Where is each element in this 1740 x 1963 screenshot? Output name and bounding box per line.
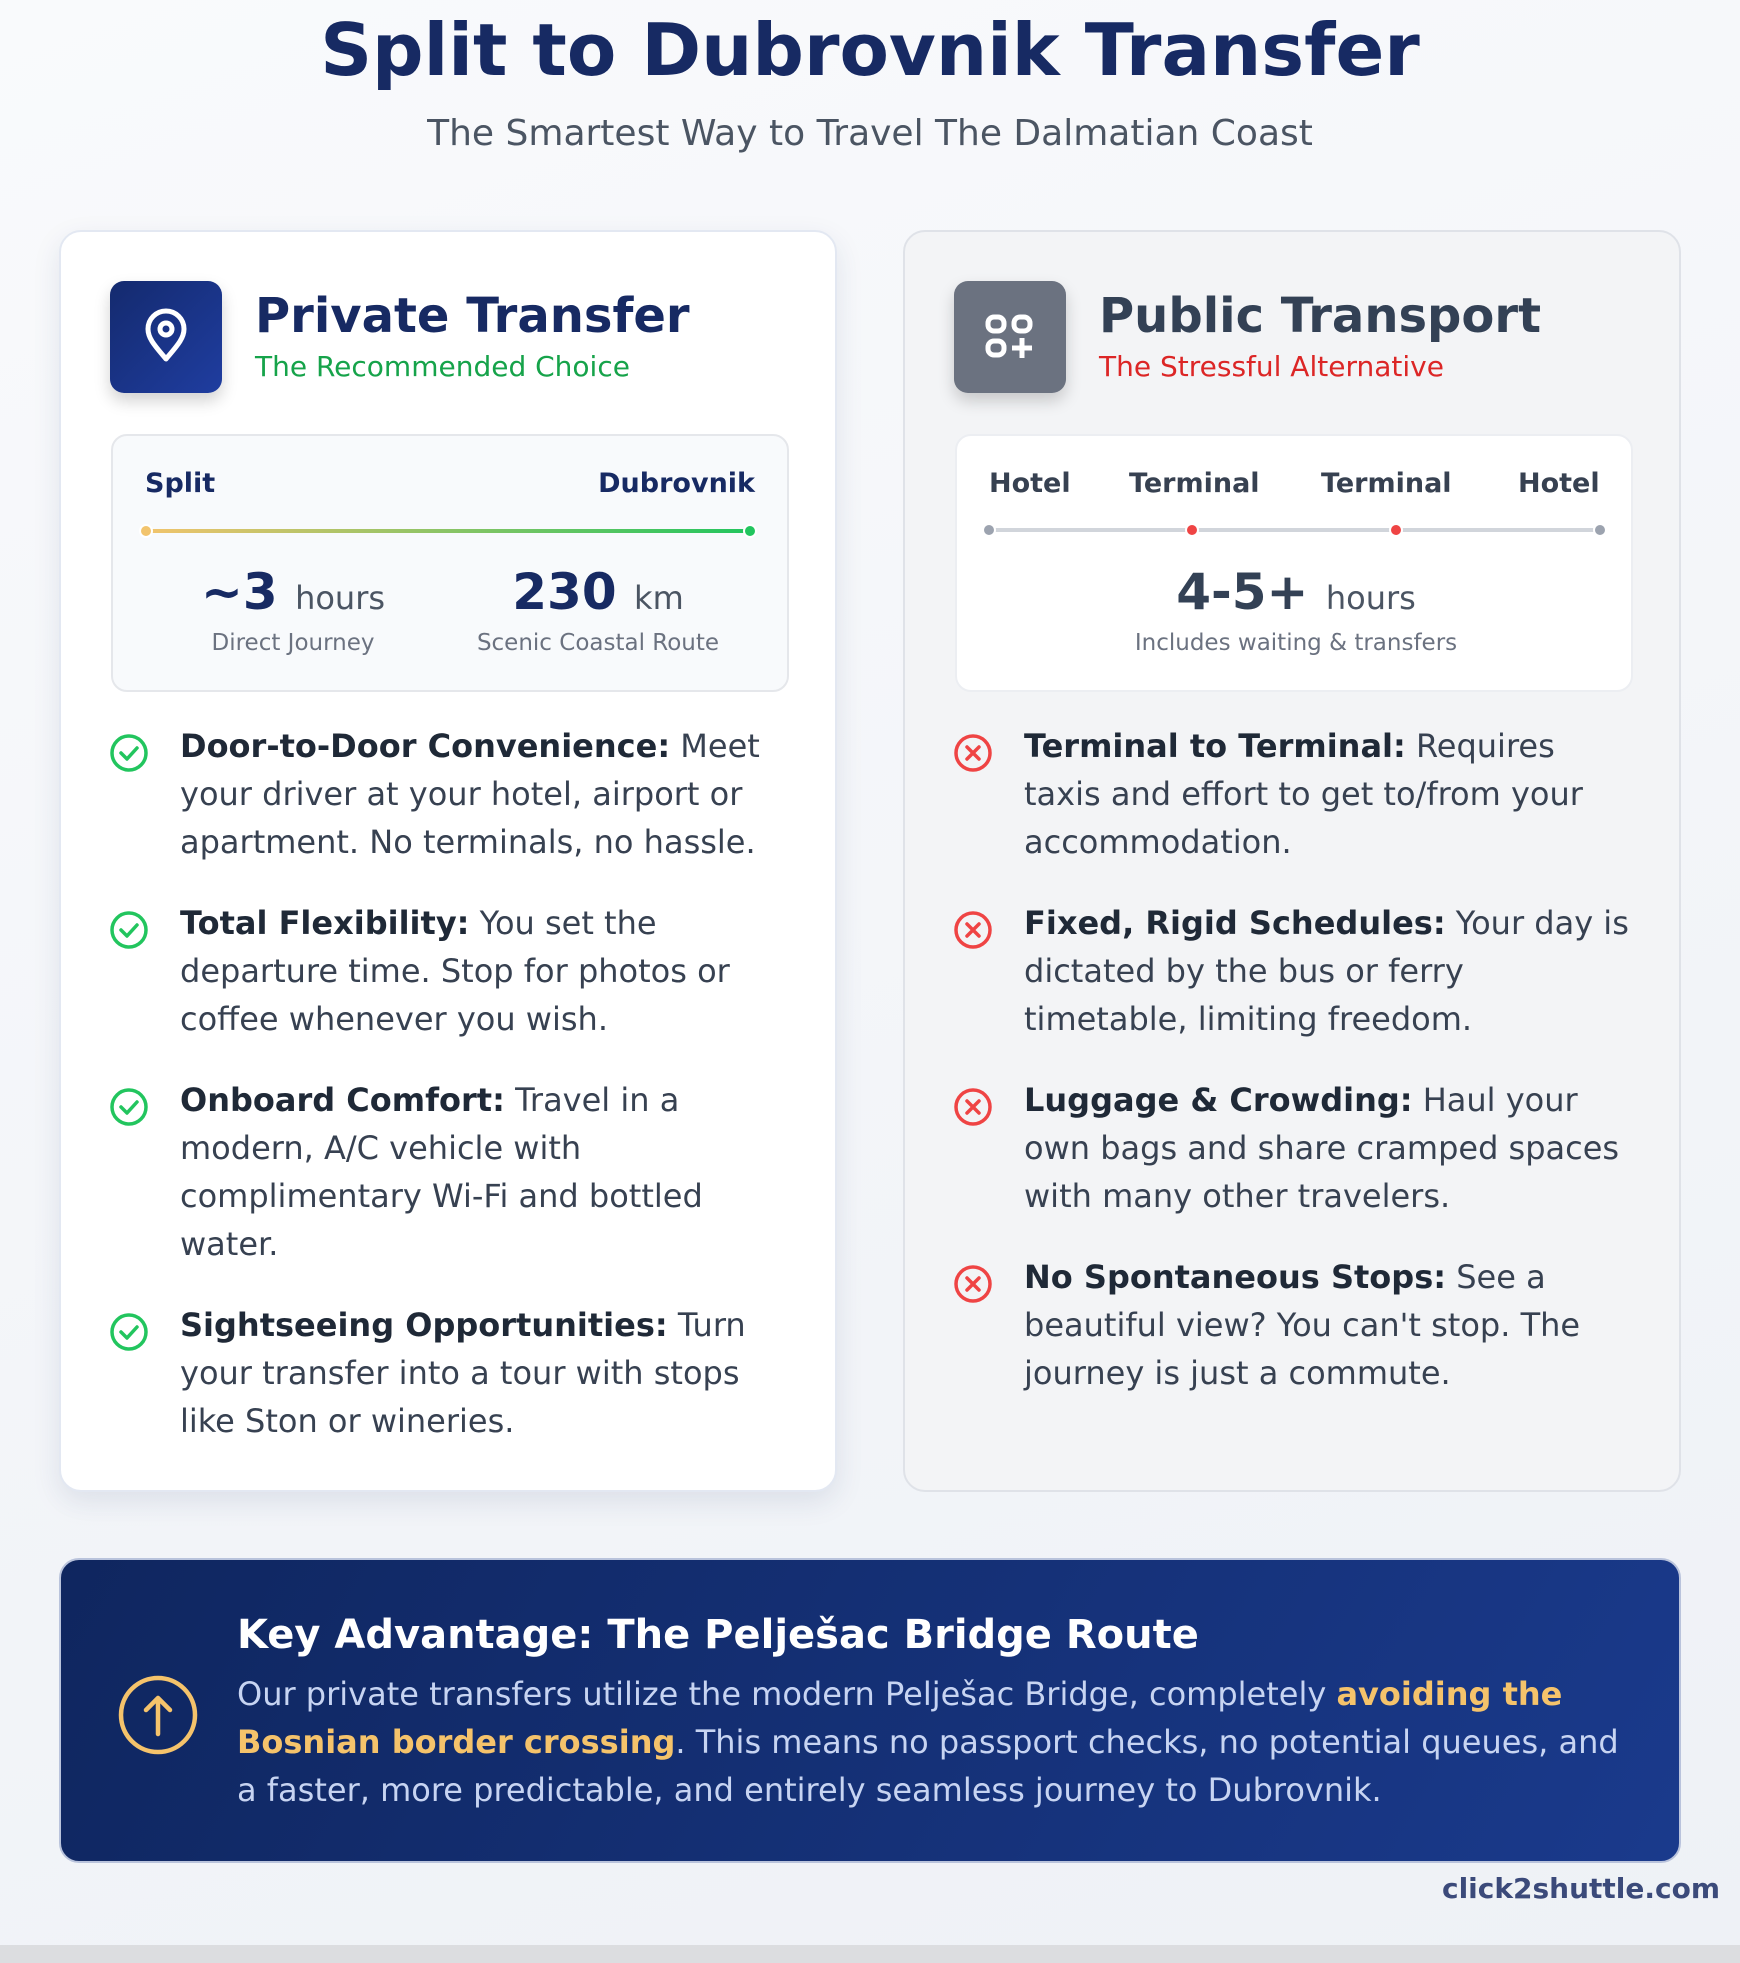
stat: km: 230 km (512, 563, 684, 621)
item: no stops: No Spontaneous Stops: See a beautiful view? You can't stop. The journey is just a commute. (1024, 1258, 1580, 1392)
label: Dubrovnik: Dubrovnik (598, 468, 755, 499)
stat: hours: ~3 hours (201, 563, 385, 621)
item: terminal: Terminal to Terminal: Requires taxis and effort to get to/from your accommodation. (1024, 727, 1583, 861)
route line with stops (984, 525, 1605, 535)
item: comfort: Onboard Comfort: Travel in a modern, A/C vehicle with complimentary Wi-Fi and bottled water. (180, 1081, 703, 1263)
banner: key advantage (59, 1558, 1681, 1863)
stat: hours: 4-5+ hours (1176, 563, 1416, 621)
item: luggage: Luggage & Crowding: Haul your own bags and share cramped spaces with many other travelers. (1024, 1081, 1619, 1215)
stat: km (477, 563, 719, 656)
footer: brand: click2shuttle.com (1442, 1872, 1720, 1905)
tagline: The Recommended Choice (255, 350, 630, 383)
item: door-to-door: Door-to-Door Convenience: Meet your driver at your hotel, airport or apartment. No terminals, no hassle. (180, 727, 760, 861)
item: schedules: Fixed, Rigid Schedules: Your day is dictated by the bus or ferry timetable, limiting freedom. (1024, 904, 1629, 1038)
heading: Private Transfer (255, 288, 690, 344)
stop labels: Terminal (1129, 468, 1260, 499)
route summary box (111, 434, 789, 692)
drawbacks list (954, 727, 1629, 1392)
stop labels: Terminal (1321, 468, 1452, 499)
subtitle: The Smartest Way to Travel The Dalmatian Coast (427, 113, 1313, 154)
panel: public transport (903, 230, 1681, 1492)
item: sightseeing: Sightseeing Opportunities: Turn your transfer into a tour with stops like Ston or wineries. (180, 1306, 746, 1440)
stat: km: Scenic Coastal Route (477, 630, 719, 656)
stop labels: Hotel (989, 468, 1071, 499)
icon: bus/grid (954, 281, 1066, 393)
stat: hours: Includes waiting & transfers (1135, 630, 1457, 656)
stat: hours: Direct Journey (212, 630, 374, 656)
banner heading: Key Advantage: The Pelješac Bridge Route (237, 1612, 1199, 1658)
banner text: Our private transfers utilize the modern Pelješac Bridge, completely avoiding the Bosnian border crossing. This means no passport checks, no potential queues, and a faster, more predictable, and entirely seamless journey to Dubrovnik. (237, 1675, 1619, 1809)
title: Split to Dubrovnik Transfer (320, 8, 1420, 92)
route summary box (955, 434, 1633, 692)
heading: Public Transport (1099, 288, 1541, 344)
tagline: The Stressful Alternative (1099, 350, 1444, 383)
route line (141, 526, 755, 536)
stop labels: Hotel (1518, 468, 1600, 499)
stat: hours (1135, 563, 1457, 656)
label: Split: Split (145, 468, 215, 499)
stat: hours (201, 563, 385, 656)
benefits list (110, 727, 760, 1440)
icon: location pin (110, 281, 222, 393)
panel: private transfer (59, 230, 837, 1492)
icon: arrow up circle (118, 1676, 198, 1754)
stop labels (989, 468, 1600, 499)
item: flexibility: Total Flexibility: You set the departure time. Stop for photos or coffee whenever you wish. (180, 904, 730, 1038)
